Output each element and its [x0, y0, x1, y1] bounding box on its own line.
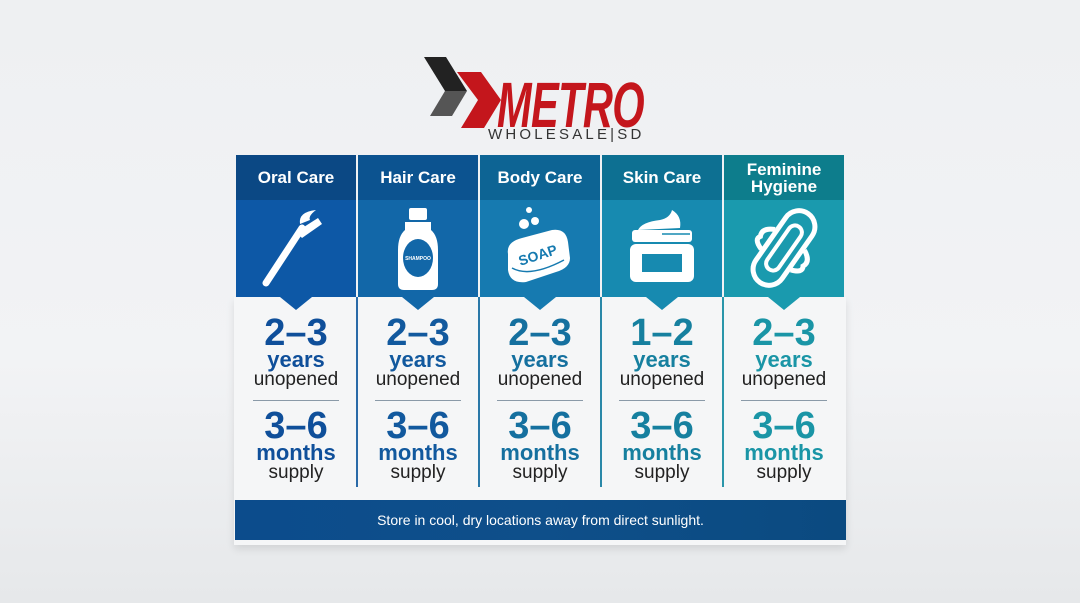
panel: body care: years	[511, 347, 569, 372]
panel: oral care: 3–6	[264, 405, 328, 447]
panel: hair care	[358, 155, 478, 487]
panel: feminine hygiene: 2–3	[752, 312, 816, 354]
panel: hair care: 2–3	[386, 312, 450, 354]
icon: chevrons	[424, 57, 501, 128]
icon: soap: SOAP	[516, 241, 559, 269]
panel: hair care: years	[389, 347, 447, 372]
panel: body care: months	[500, 440, 580, 465]
panel: oral care: 2–3	[264, 312, 328, 354]
icon: toothbrush	[236, 200, 356, 297]
icon: pad	[724, 200, 844, 297]
panel: skin care: supply	[635, 462, 689, 483]
panel: oral care: unopened	[254, 369, 338, 390]
panel: skin care: 1–2	[630, 312, 694, 354]
panel: skin care: 3–6	[630, 405, 694, 447]
icon: shampoo: SHAMPOO	[405, 256, 431, 262]
panel: feminine hygiene: months	[744, 440, 824, 465]
logo	[424, 57, 644, 143]
panel: skin care: years	[633, 347, 691, 372]
table background	[234, 297, 846, 545]
icon: shampoo	[358, 200, 478, 297]
panel: body care: 2–3	[508, 312, 572, 354]
panel: body care: supply	[513, 462, 567, 483]
panel: oral care	[236, 155, 356, 487]
panel: feminine hygiene: 3–6	[752, 405, 816, 447]
panel: oral care: years	[267, 347, 325, 372]
panel: oral care: months	[256, 440, 336, 465]
panel: feminine hygiene	[724, 155, 844, 487]
panel: feminine hygiene: Hygiene	[751, 176, 817, 196]
panel: feminine hygiene: unopened	[742, 369, 826, 390]
panel: skin care	[602, 155, 722, 487]
logo text: METRO	[497, 69, 644, 141]
panel: body care: unopened	[498, 369, 582, 390]
panel: oral care: Oral Care	[258, 168, 334, 187]
panel: body care: 3–6	[508, 405, 572, 447]
panel: feminine hygiene: years	[755, 347, 813, 372]
panel: hair care: unopened	[376, 369, 460, 390]
icon: soap	[480, 200, 600, 297]
panel: oral care: supply	[269, 462, 323, 483]
panel: body care: Body Care	[497, 168, 583, 187]
panel: feminine hygiene: supply	[757, 462, 811, 483]
panel: body care	[480, 155, 600, 487]
footer banner	[235, 500, 846, 540]
panel: skin care: Skin Care	[623, 168, 701, 187]
panel: hair care: 3–6	[386, 405, 450, 447]
panel: feminine hygiene: Feminine	[747, 160, 821, 178]
panel: skin care: unopened	[620, 369, 704, 390]
footer banner: Store in cool, dry locations away from direct sunlight.	[377, 512, 704, 528]
panel: hair care: months	[378, 440, 458, 465]
panel: hair care: supply	[391, 462, 445, 483]
panel: skin care: months	[622, 440, 702, 465]
panel: hair care: Hair Care	[380, 168, 456, 187]
logo: WHOLESALE|SD	[488, 126, 644, 143]
icon: cream jar	[602, 200, 722, 297]
